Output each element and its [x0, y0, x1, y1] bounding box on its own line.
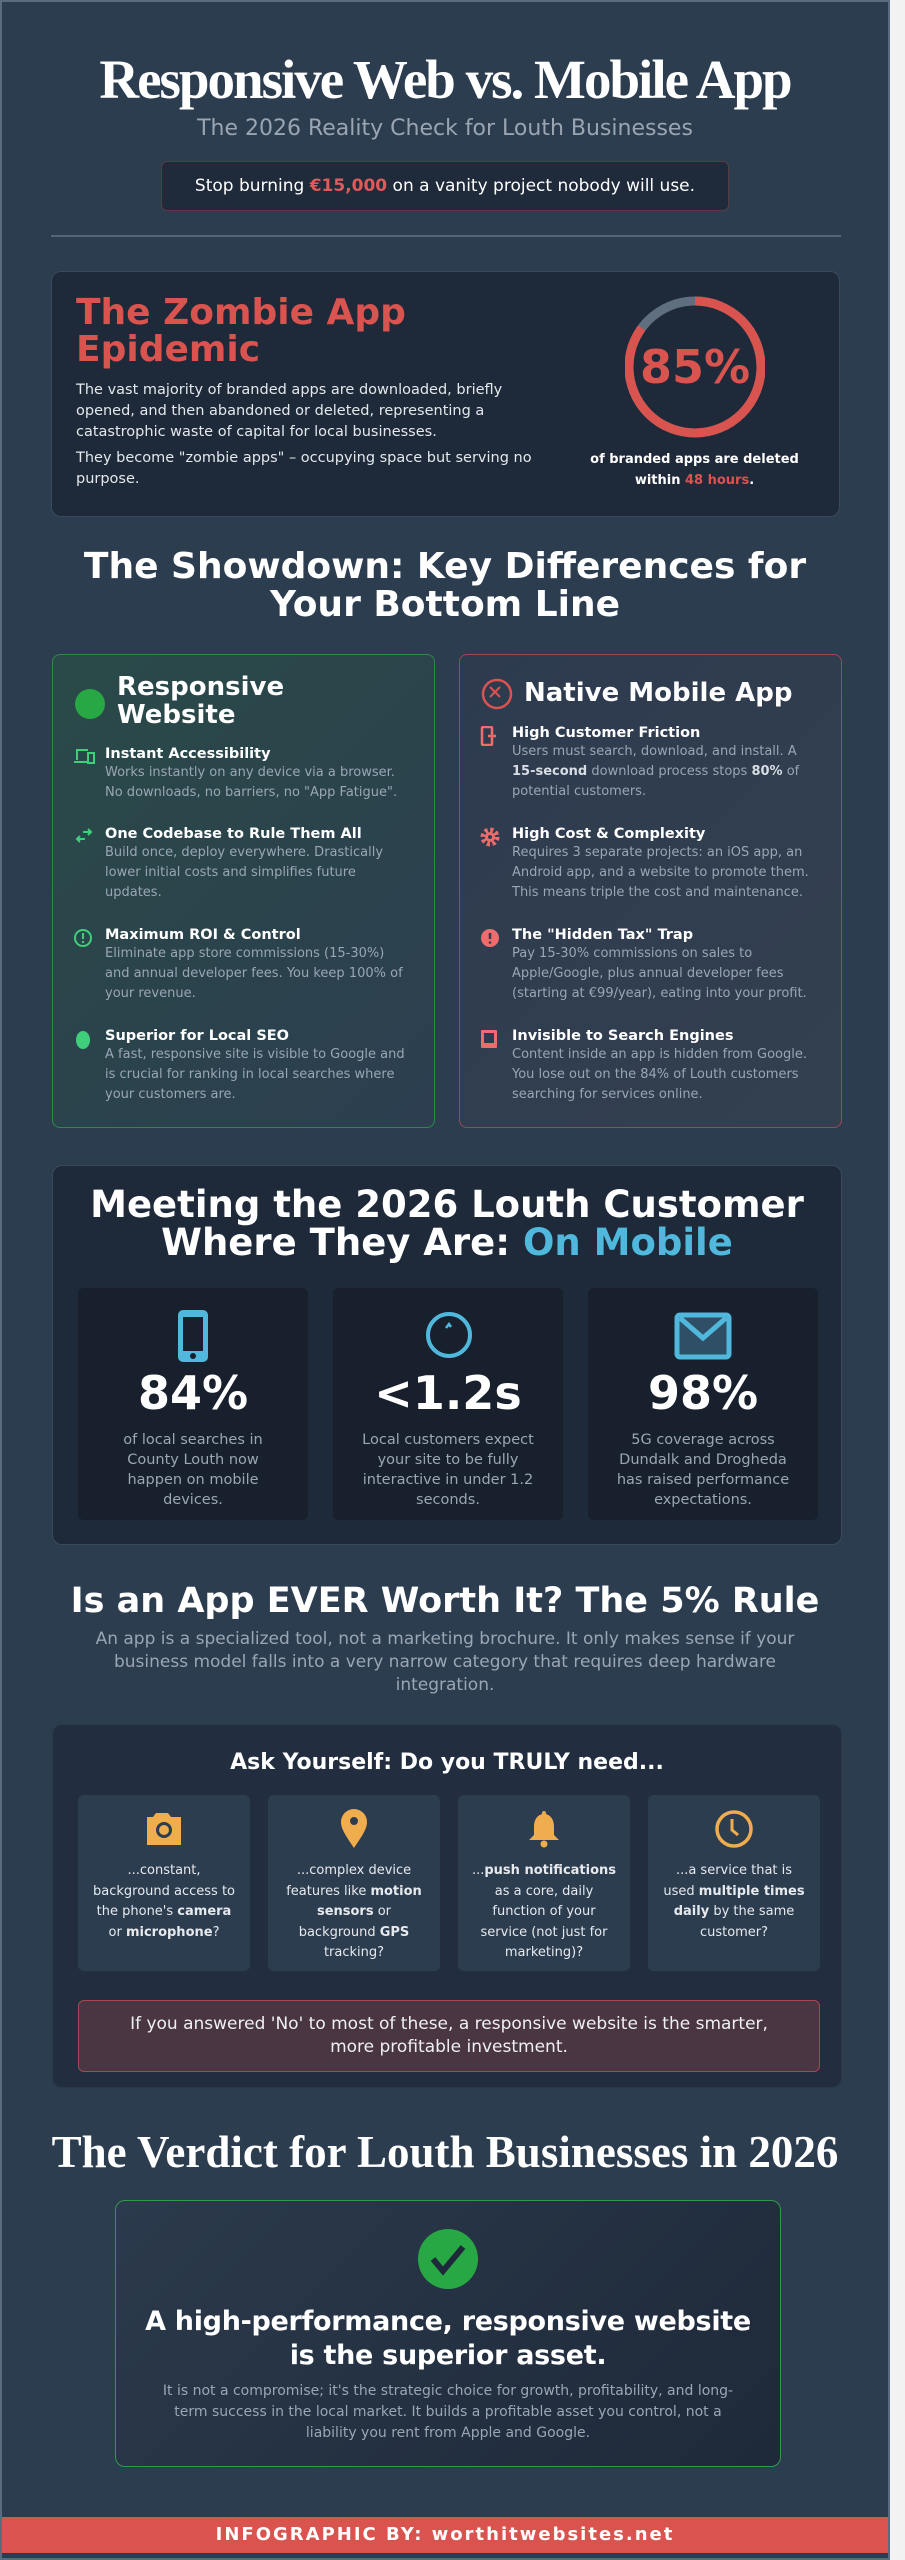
heading: responsive website: Responsive: [117, 672, 284, 702]
card: push notifications: [458, 1795, 630, 1971]
item: one codebase: [76, 826, 383, 900]
callout: answered no: If you answered 'No' to most of these, a responsive website is the smarter,: [130, 2014, 768, 2034]
item: maximum roi: Maximum ROI & Control: [105, 927, 301, 943]
heading: zombie app: Epidemic: [76, 329, 260, 370]
item: high cost: [480, 826, 809, 900]
item: instant accessibility: Instant Accessibility: [105, 746, 271, 762]
icon: bell: [529, 1811, 559, 1848]
heading: responsive website: [117, 672, 284, 730]
stat: 98%: [588, 1288, 818, 1520]
caption: donut: [590, 452, 799, 488]
card: multiple times daily: [648, 1795, 820, 1971]
text: verdict headline: A high-performance, responsive website: [145, 2306, 751, 2337]
item: invisible to search: Invisible to Search Engines: [512, 1028, 733, 1044]
text: verdict headline: is the superior asset.: [290, 2340, 606, 2371]
item: invisible to search: Content inside an app is hidden from Google. You lose out on the 84% of Louth customers searching for services online.: [512, 1047, 807, 1102]
panel: ask yourself: [52, 1724, 842, 2088]
panel: verdict: [115, 2200, 781, 2467]
heading: on mobile: Meeting the 2026 Louth Customer: [90, 1183, 804, 1226]
heading: showdown: [84, 546, 806, 625]
stat: 84%: [78, 1288, 308, 1520]
icon: stopwatch: [426, 1312, 472, 1358]
icon: camera: [147, 1813, 181, 1845]
card: camera: [78, 1795, 250, 1971]
item: instant accessibility: Works instantly on any device via a browser. No downloads, no barriers, no "App Fatigue".: [105, 765, 397, 800]
panel: native mobile app: [459, 654, 842, 1128]
footer: [2, 2517, 888, 2553]
footer: INFOGRAPHIC BY: worthitwebsites.net: [216, 2524, 674, 2545]
item: high cost: High Cost & Complexity: [512, 826, 705, 842]
stat: 84%: of local searches in County Louth now happen on mobile devices.: [123, 1432, 263, 1508]
icon: envelope: [674, 1312, 732, 1360]
panel: meeting the customer on mobile: [52, 1165, 842, 1545]
text: verdict body: It is not a compromise; it's the strategic choice for growth, profitability, and long-term success in the local market. It builds a profitable asset you control, not a liability you rent from Apple and Google.: [163, 2383, 733, 2441]
text: verdict headline: [145, 2306, 751, 2371]
item: maximum roi: Eliminate app store commissions (15-30%) and annual developer fees. You keep 100% of your revenue.: [105, 946, 403, 1001]
stat: 98%: 5G coverage across Dundalk and Drogheda has raised performance expectations.: [617, 1432, 789, 1508]
item: hidden tax: Pay 15-30% commissions on sales to Apple/Google, plus annual developer fees (starting at €99/year), eating into your profit.: [512, 946, 807, 1001]
item: hidden tax: The "Hidden Tax" Trap: [512, 927, 693, 943]
caption: donut: of branded apps are deleted: [590, 452, 799, 467]
callout: answered no: more profitable investment.: [330, 2037, 568, 2057]
stat: 98%: 98%: [648, 1366, 758, 1420]
heading: responsive website: Website: [117, 700, 235, 730]
heading: zombie app: [76, 292, 406, 370]
stat: <1.2s: Local customers expect your site to be fully interactive in under 1.2 seconds.: [362, 1432, 534, 1508]
heading: zombie app: The Zombie App: [76, 292, 406, 333]
icon: red x circle: [482, 678, 512, 710]
chart: 85% donut: [625, 296, 765, 438]
card: camera: ...constant,: [127, 1863, 201, 1878]
heading: native mobile app: Native Mobile App: [524, 678, 792, 708]
item: high customer friction: Users must search, download, and install. A 15-second download process stops 80% of potential customers.: [512, 744, 799, 799]
subtitle: The 2026 Reality Check for Louth Businesses: [197, 116, 693, 141]
caption: donut: within 48 hours.: [635, 473, 754, 488]
heading: on mobile: Where They Are: On Mobile: [161, 1221, 733, 1264]
stat: <1.2s: [333, 1288, 563, 1520]
item: one codebase: One Codebase to Rule Them All: [105, 826, 362, 842]
item: high customer friction: High Customer Friction: [512, 725, 700, 741]
item: local seo: [76, 1028, 405, 1102]
heading: showdown: The Showdown: Key Differences for: [84, 546, 806, 587]
chart: 85% donut: 85%: [640, 340, 750, 394]
panel: zombie app epidemic: [51, 271, 840, 517]
heading: verdict: The Verdict for Louth Businesses in 2026: [52, 2127, 838, 2177]
icon: location pin: [341, 1809, 367, 1848]
panel: responsive website: [52, 654, 435, 1128]
stat: <1.2s: <1.2s: [374, 1366, 522, 1420]
item: maximum roi: [74, 927, 403, 1001]
callout: answered no: [78, 2000, 820, 2072]
callout: stop burning: [161, 161, 729, 211]
card: gps: [268, 1795, 440, 1971]
heading: showdown: Your Bottom Line: [270, 584, 620, 625]
item: high cost: Requires 3 separate projects: an iOS app, an Android app, and a website to promote them. This means triple the cost and maintenance.: [512, 845, 809, 900]
card: push notifications: ...push notifications as a core, daily function of your service (not just for marketing)?: [472, 1863, 616, 1960]
callout: stop burning: Stop burning €15,000 on a vanity project nobody will use.: [195, 176, 695, 196]
item: instant accessibility: [74, 746, 397, 800]
text: 5% rule intro: An app is a specialized tool, not a marketing brochure. It only makes sense if your business model falls into a very narrow category that requires deep hardware integration.: [96, 1629, 794, 1695]
item: local seo: A fast, responsive site is visible to Google and is crucial for ranking in local searches where your customers are.: [105, 1047, 405, 1102]
icon: check circle: [418, 2229, 478, 2289]
heading: on mobile: [90, 1183, 804, 1264]
text: zombie description: The vast majority of branded apps are downloaded, briefly opened, and then abandoned or deleted, representing a catastrophic waste of capital for local businesses. They become "zombie apps" – occupying space but serving no purpose.: [76, 382, 532, 487]
heading: 5% rule: Is an App EVER Worth It? The 5% Rule: [71, 1581, 819, 1621]
item: one codebase: Build once, deploy everywhere. Drastically lower initial costs and simplifies future updates.: [105, 845, 383, 900]
card: multiple times daily: ...a service that is used multiple times daily by the same customer?: [663, 1863, 805, 1940]
icon: phone: [178, 1310, 208, 1362]
title: Responsive Web vs. Mobile App: [99, 49, 791, 110]
heading: ask yourself: Ask Yourself: Do you TRULY need...: [230, 1750, 664, 1775]
item: hidden tax: [481, 927, 807, 1001]
item: invisible to search: [481, 1028, 807, 1102]
card: gps: ...complex device features like motion sensors or background GPS tracking?: [286, 1863, 422, 1960]
stat: 84%: 84%: [138, 1366, 248, 1420]
card: camera: background access to the phone's camera or microphone?: [93, 1884, 235, 1940]
item: high customer friction: [480, 725, 800, 799]
item: local seo: Superior for Local SEO: [105, 1028, 289, 1044]
icon: green circle: [75, 689, 105, 719]
icon: clock: [715, 1810, 753, 1848]
